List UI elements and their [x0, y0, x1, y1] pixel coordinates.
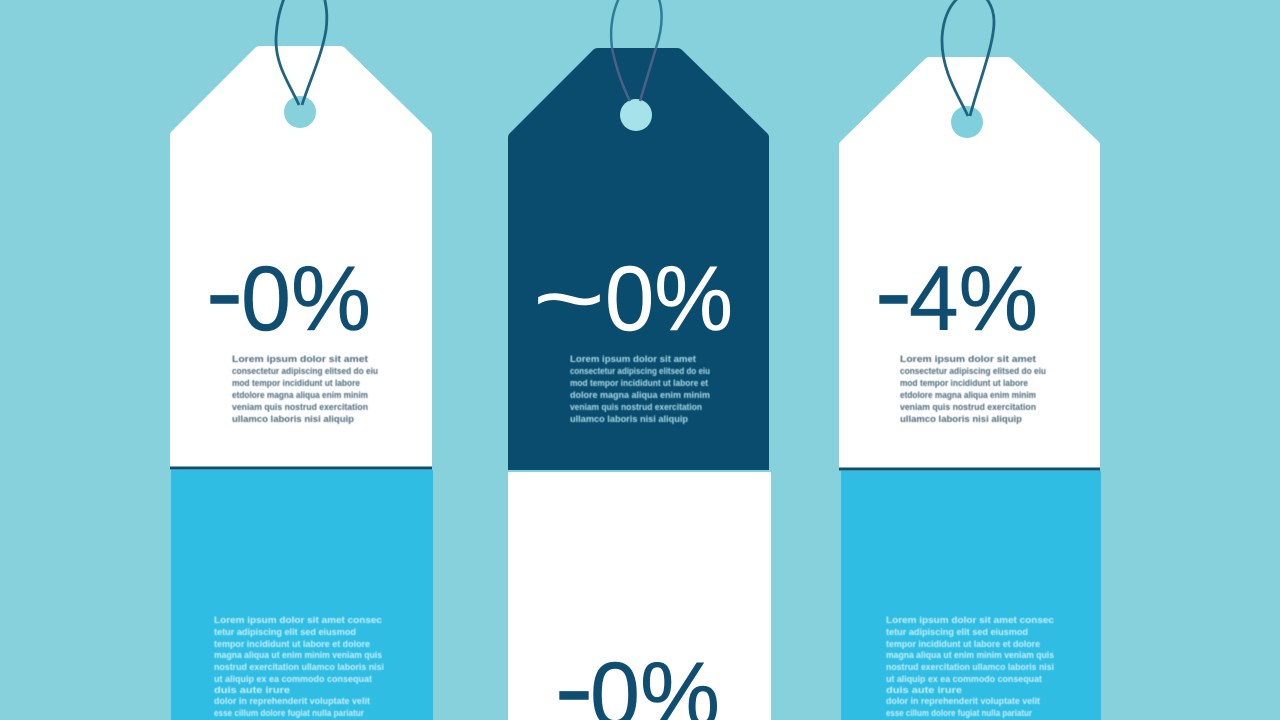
heading: discount value: 0% — [605, 248, 733, 350]
text block: upper description: consectetur adipiscing elitsed do eiu — [232, 366, 378, 377]
text block: upper description: mod tempor incididunt ut labore — [232, 378, 360, 389]
text block: lower description: tetur adipiscing elit sed eiusmod — [214, 627, 356, 638]
text block: lower description: duis aute irure — [214, 685, 290, 696]
text block: upper description: etdolore magna aliqua enim minim — [900, 390, 1036, 401]
tag top: navy — [508, 48, 769, 470]
tag bottom: white — [508, 472, 771, 720]
text block: upper description: ullamco laboris nisi aliquip — [900, 414, 1022, 425]
panel: left price tag — [170, 0, 433, 720]
text block: upper description: mod tempor incididunt ut labore et — [570, 378, 709, 389]
text block: lower description: Lorem ipsum dolor sit amet consec — [886, 615, 1054, 626]
text block: lower description: Lorem ipsum dolor sit amet consec — [214, 615, 382, 626]
text block: lower description: ut aliquip ex ea commodo consequat — [886, 674, 1043, 685]
panel: center price tag — [508, 0, 771, 720]
divider line — [170, 466, 432, 470]
text block: upper description: consectetur adipiscing elitsed do eiu — [900, 366, 1046, 377]
text block: upper description — [232, 354, 378, 425]
tag bottom: blue — [171, 470, 433, 720]
text block: upper description: ullamco laboris nisi aliquip — [232, 414, 354, 425]
heading: discount value: ~ — [533, 248, 605, 350]
text block: upper description: Lorem ipsum dolor sit amet — [232, 354, 369, 365]
divider line — [839, 468, 1100, 470]
text block: lower description: dolor in reprehenderit voluptate velit — [886, 696, 1041, 707]
icon: string loop — [942, 0, 994, 116]
text block: lower description: dolor in reprehenderit voluptate velit — [214, 696, 371, 707]
text block: lower description: ut aliquip ex ea commodo consequat — [214, 674, 373, 685]
tag bottom: blue — [841, 471, 1101, 720]
text block: upper description: veniam quis nostrud exercitation — [570, 402, 702, 413]
text block: lower description — [214, 615, 384, 719]
heading: discount value: 4% — [909, 248, 1038, 350]
text block: upper description: mod tempor incididunt ut labore — [900, 378, 1028, 389]
text block: lower description: esse cillum dolore fugiat nulla pariatur — [886, 708, 1032, 719]
text block: upper description: ullamco laboris nisi aliquip — [570, 414, 688, 425]
text block: lower description: nostrud exercitation ullamco laboris nisi — [214, 662, 384, 673]
tag top: white — [839, 57, 1100, 469]
text block: upper description: dolore magna aliqua enim minim — [570, 390, 710, 401]
text block: lower description: magna aliqua ut enim minim veniam quis — [214, 650, 382, 661]
tag top: white — [170, 46, 432, 468]
text block: lower description: nostrud exercitation ullamco laboris nisi — [886, 662, 1054, 673]
text block: lower description — [886, 615, 1054, 719]
icon: eyelet hole — [620, 99, 652, 131]
text block: lower description: tempor incididunt ut labore et dolore — [886, 639, 1040, 650]
text block: lower description: duis aute irure — [886, 685, 962, 696]
text block: lower description: esse cillum dolore fugiat nulla pariatur — [214, 708, 364, 719]
icon: eyelet hole — [284, 96, 316, 128]
text block: upper description: Lorem ipsum dolor sit amet — [900, 354, 1037, 365]
text block: upper description — [900, 354, 1046, 425]
text block: upper description: consectetur adipiscing elitsed do eiu — [570, 366, 710, 377]
text block: upper description: etdolore magna aliqua enim minim — [232, 390, 368, 401]
icon: string loop — [276, 0, 327, 105]
text block: lower description: tetur adipiscing elit sed eiusmod — [886, 627, 1028, 638]
text block: upper description: veniam quis nostrud exercitation — [232, 402, 368, 413]
heading: discount value: 0% — [241, 248, 371, 350]
heading: discount value: – — [880, 241, 907, 343]
text block: upper description: Lorem ipsum dolor sit amet — [570, 354, 697, 365]
text block: upper description — [570, 354, 710, 425]
text block: lower description: tempor incididunt ut labore et dolore — [214, 639, 370, 650]
icon: string loop — [611, 0, 662, 48]
panel: right price tag — [839, 0, 1101, 720]
heading: discount value: – — [211, 241, 238, 343]
text block: lower description: magna aliqua ut enim minim veniam quis — [886, 650, 1054, 661]
icon: string over tag — [612, 48, 656, 101]
icon: eyelet hole — [951, 106, 983, 138]
text block: upper description: veniam quis nostrud exercitation — [900, 402, 1036, 413]
